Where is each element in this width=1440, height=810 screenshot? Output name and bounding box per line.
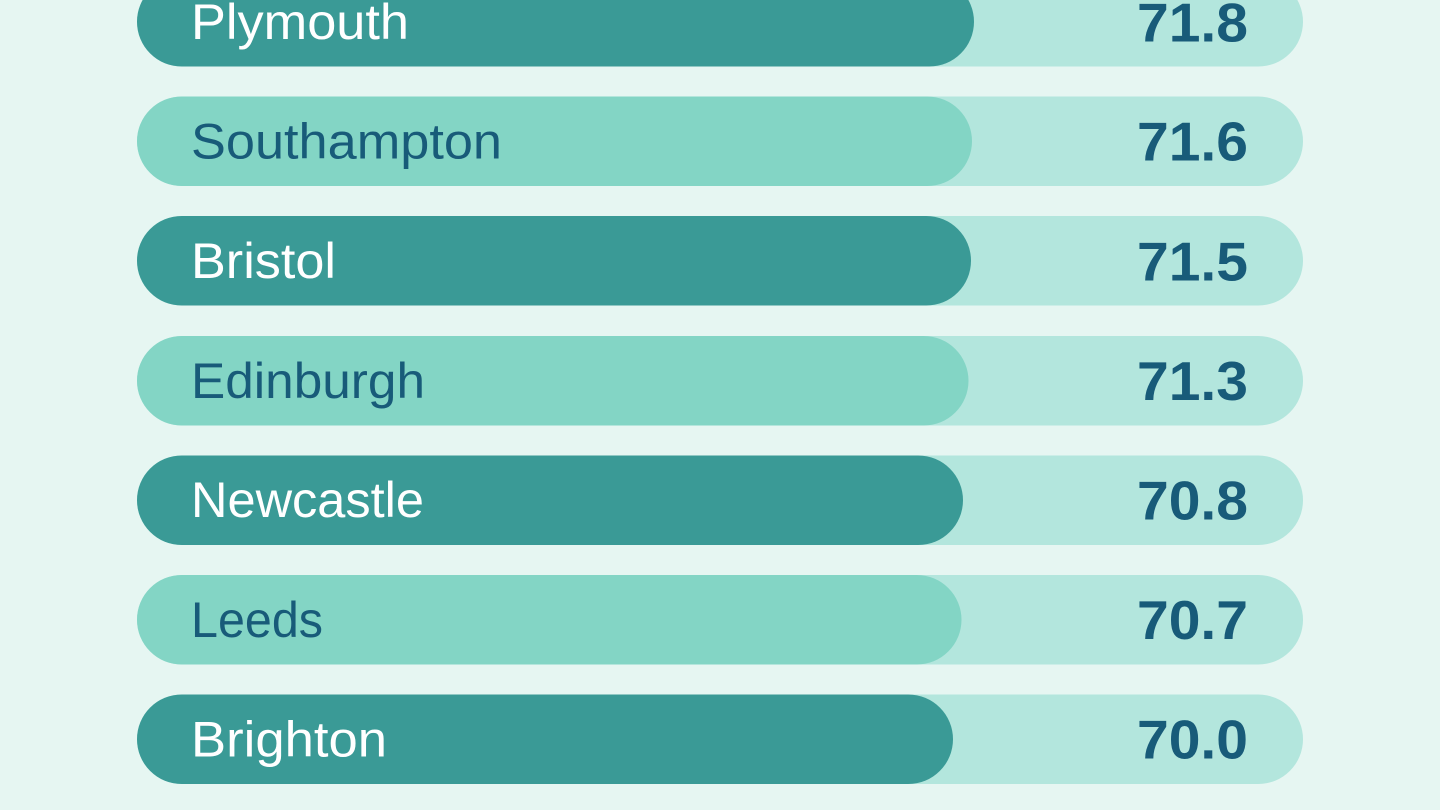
row: Bristol 71.5: Bristol	[191, 233, 336, 289]
row: Brighton 70.0	[137, 694, 1303, 784]
row: Southampton 71.6: Southampton	[191, 114, 502, 170]
row: Southampton 71.6: 71.6	[1137, 110, 1248, 172]
row: Newcastle 70.8: Newcastle	[191, 472, 424, 528]
row: Leeds 70.7: Leeds	[191, 592, 323, 648]
row: Brighton 70.0: 70.0	[1137, 708, 1248, 770]
row: Brighton 70.0: Brighton	[191, 712, 387, 768]
row: Edinburgh 71.3: 71.3	[1137, 350, 1248, 412]
row: Leeds 70.7: 70.7	[1137, 589, 1248, 651]
row: Newcastle 70.8: 70.8	[1137, 470, 1248, 532]
row: Plymouth 71.8	[137, 0, 1303, 66]
row: Leeds 70.7	[137, 575, 1303, 664]
row: Bristol 71.5: 71.5	[1137, 230, 1248, 292]
row: Edinburgh 71.3: Edinburgh	[191, 353, 425, 409]
row: Southampton 71.6	[137, 96, 1303, 186]
row: Newcastle 70.8	[137, 456, 1303, 545]
row: Bristol 71.5	[137, 216, 1303, 306]
bar chart rows	[137, 0, 1303, 784]
row: Edinburgh 71.3	[137, 336, 1303, 426]
